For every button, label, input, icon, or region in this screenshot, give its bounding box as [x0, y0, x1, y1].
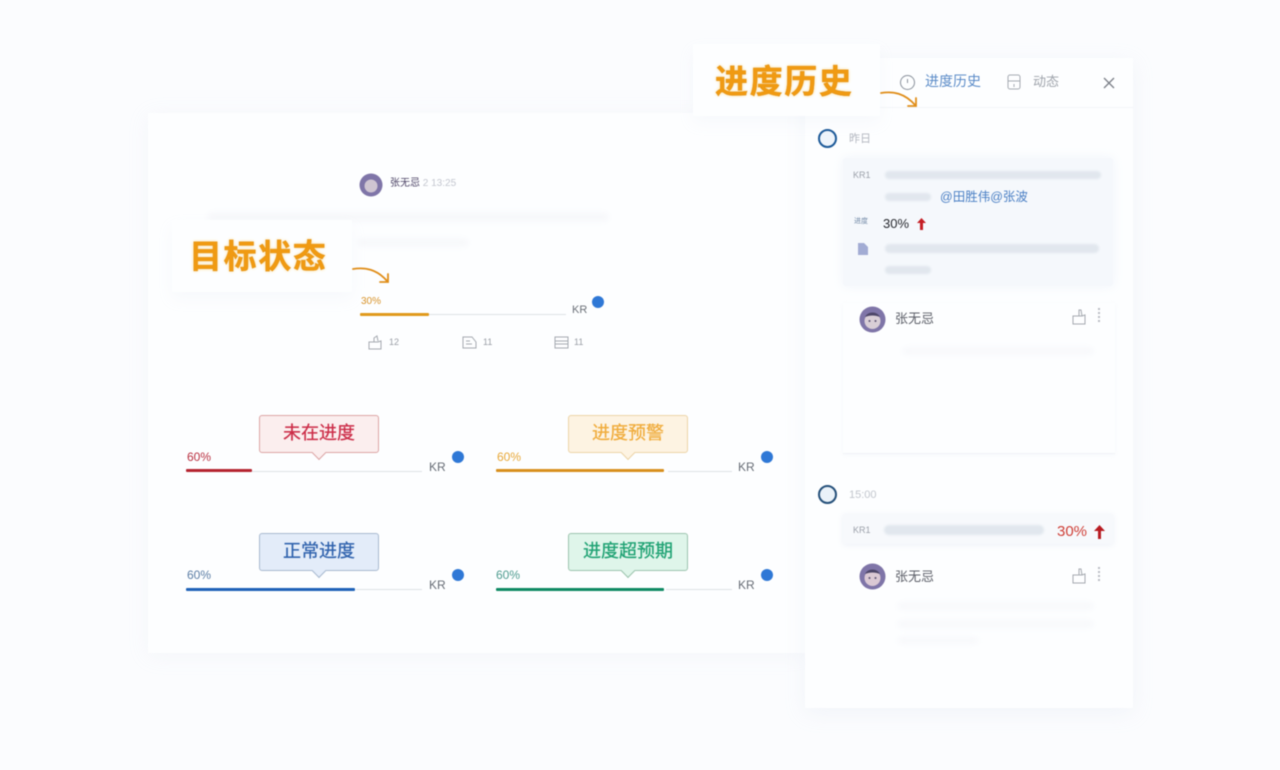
- icon: thumbs up: [1072, 568, 1086, 584]
- icon: clock: [899, 74, 916, 90]
- fill: [186, 469, 252, 472]
- KR label: KR: [738, 460, 755, 474]
- blurred comment text: [898, 603, 1098, 643]
- callout title: 目标状态: [189, 238, 327, 275]
- progress value: 30%: [883, 216, 909, 231]
- panel: target card: [148, 113, 808, 653]
- callout: progress history: [693, 44, 880, 116]
- arrow: target status: [351, 266, 390, 284]
- timeline node: second: [818, 485, 837, 504]
- avatar: card owner: [358, 172, 384, 198]
- tooltip label: 进度超预期: [583, 541, 673, 561]
- comment: first: [843, 303, 1115, 454]
- track: [668, 471, 732, 472]
- track: [252, 471, 422, 472]
- icon: thumbs up: [368, 335, 382, 350]
- panel: progress history drawer: [805, 58, 1133, 708]
- icon: comment: [462, 336, 477, 349]
- main KR label: KR: [572, 304, 587, 316]
- task count: 11: [574, 337, 583, 347]
- timeline date: second: 15:00: [849, 489, 877, 501]
- main progress value: 30%: [361, 296, 381, 307]
- fill: [496, 588, 664, 591]
- icon: up arrow: [1094, 524, 1106, 540]
- mention links: @田胜伟@张波: [940, 190, 1028, 204]
- tooltip label: [568, 415, 688, 453]
- callout title: 进度历史: [715, 63, 853, 100]
- timeline date: first: 昨日: [849, 133, 871, 145]
- tab: activity: [1007, 74, 1059, 90]
- comment: second: [858, 562, 1100, 590]
- KR badge: [452, 569, 464, 581]
- icon: thumbs up: [1072, 309, 1086, 325]
- track: [666, 589, 732, 590]
- like count: 12: [389, 337, 399, 347]
- percent: 60%: [496, 568, 520, 582]
- KR badge: [452, 451, 464, 463]
- icon: close: [1103, 77, 1115, 89]
- update card: second: [843, 514, 1113, 544]
- tooltip label: [568, 533, 688, 571]
- update card: first: [843, 158, 1113, 286]
- avatar: [858, 562, 886, 590]
- blurred description lines: [208, 213, 608, 253]
- blurred line short: [885, 193, 931, 201]
- track: [356, 589, 422, 590]
- percent: 60%: [187, 568, 211, 582]
- KR label: KR1: [853, 525, 871, 535]
- percent: 60%: [187, 450, 211, 464]
- blurred comment text: [903, 348, 1093, 354]
- tab label: 动态: [1033, 74, 1059, 89]
- stats row: likes, comments, tasks: [368, 335, 584, 350]
- percent: 60%: [497, 450, 521, 464]
- tab divider: [875, 107, 1133, 108]
- blurred attachment line: [885, 244, 1099, 253]
- tooltip label: [259, 533, 379, 571]
- progress label: 进度: [854, 218, 868, 225]
- tab: progress history: [899, 73, 981, 90]
- icon: task: [554, 336, 569, 349]
- arrow: progress history: [879, 90, 918, 108]
- KR label: KR1: [853, 170, 871, 180]
- icon: document: [1007, 74, 1021, 90]
- main KR badge: [592, 296, 604, 308]
- tooltip label: [259, 415, 379, 453]
- status: normal progress: [185, 532, 465, 592]
- status: ahead of schedule: [495, 532, 774, 592]
- fill: [496, 469, 664, 472]
- fill: [186, 588, 355, 591]
- icon: more menu: [1098, 567, 1102, 581]
- icon: more menu: [1098, 308, 1102, 322]
- tooltip label: 进度预警: [592, 423, 664, 443]
- blurred line: [885, 171, 1101, 179]
- blurred line: [884, 525, 1044, 535]
- KR label: KR: [429, 460, 446, 474]
- status: progress warning: [495, 414, 774, 474]
- owner name and time: 张无忌 2 13:25: [390, 178, 456, 189]
- callout: target status: [172, 220, 352, 292]
- KR badge: [761, 569, 773, 581]
- KR badge: [761, 451, 773, 463]
- icon: up arrow: [916, 218, 926, 231]
- tab label: 进度历史: [925, 73, 981, 89]
- status: behind schedule: [185, 414, 465, 474]
- main progress track: [360, 314, 566, 315]
- icon: attachment: [858, 242, 868, 256]
- commenter name: 张无忌: [895, 569, 934, 584]
- tooltip label: 未在进度: [283, 423, 355, 443]
- tooltip label: 正常进度: [283, 541, 355, 561]
- main progress fill: [360, 313, 429, 316]
- KR label: KR: [738, 578, 755, 592]
- commenter name: 张无忌: [895, 311, 934, 326]
- avatar: [858, 306, 886, 334]
- comment count: 11: [483, 337, 492, 347]
- timeline node: first: [818, 129, 837, 148]
- progress value: 30%: [1057, 523, 1087, 540]
- blurred attachment line short: [885, 266, 931, 274]
- KR label: KR: [429, 578, 446, 592]
